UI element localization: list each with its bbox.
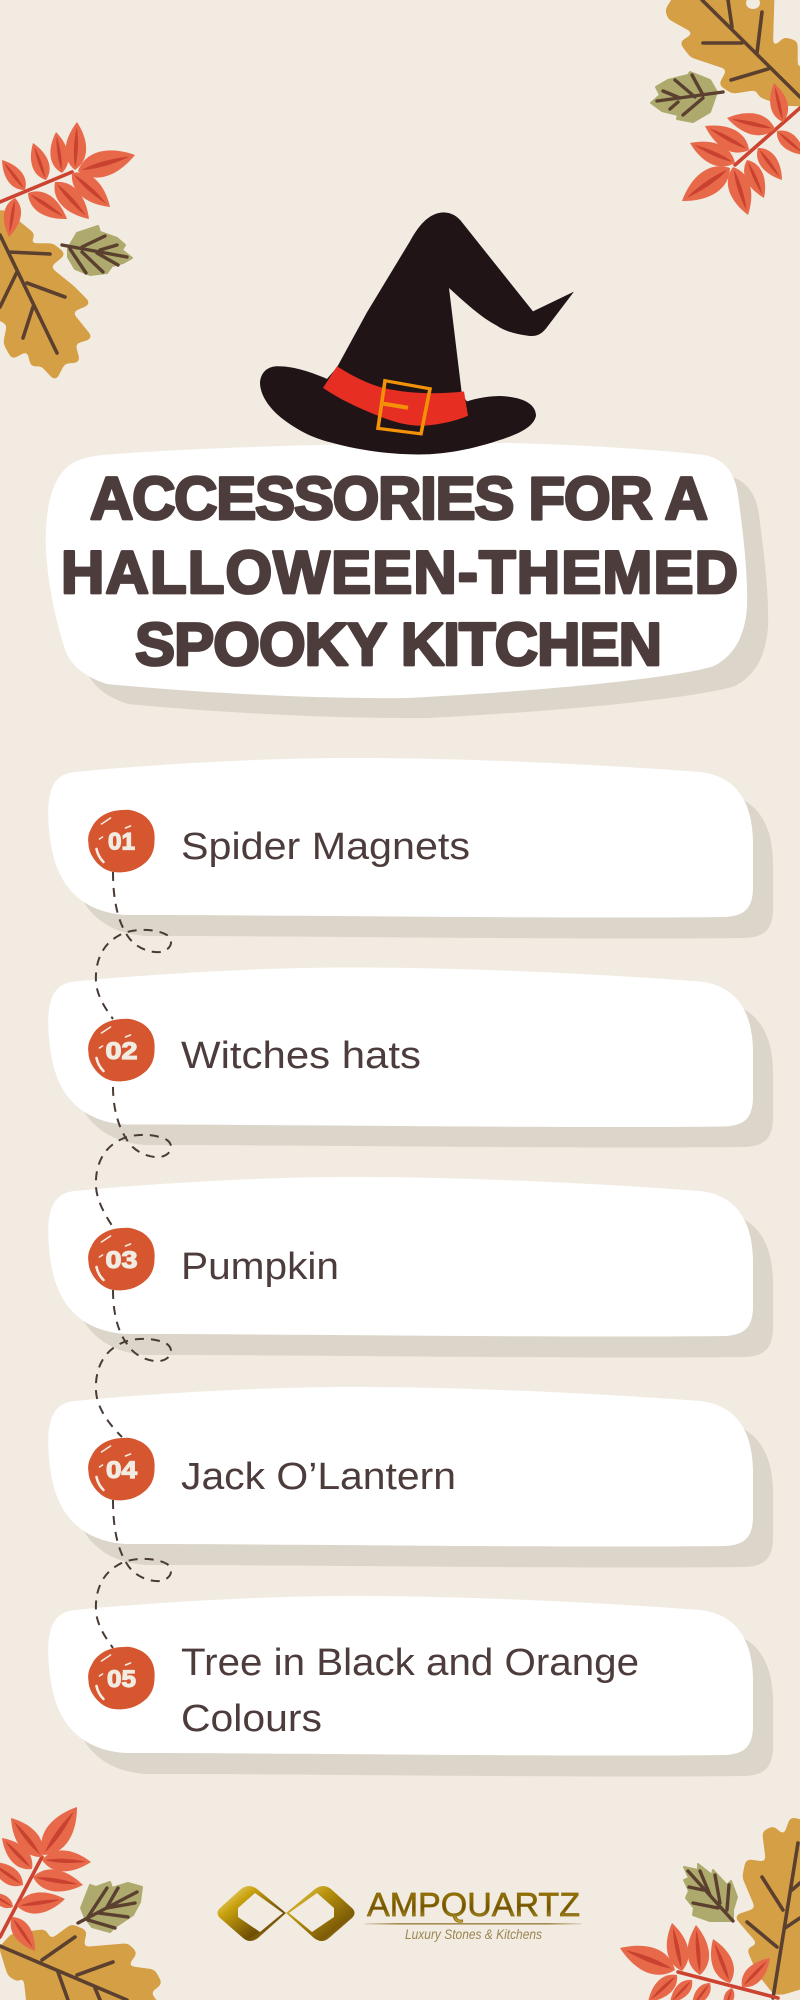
card 4 shadow <box>68 1408 773 1568</box>
witch hat <box>260 212 574 455</box>
title: SPOOKY KITCHEN <box>135 611 662 678</box>
dashed connector 1 to 2 <box>96 872 171 1019</box>
dashed connector 4 to 5 <box>96 1500 171 1648</box>
badge 05 <box>88 1647 155 1709</box>
dashed connector 2 to 3 <box>96 1087 171 1227</box>
title panel <box>46 443 747 698</box>
rowan sprig <box>0 122 138 238</box>
leaf cluster: bottom right <box>615 1820 800 2000</box>
badge 05: 05 <box>107 1666 136 1693</box>
title panel shadow <box>67 463 768 718</box>
card 3 <box>48 1177 753 1337</box>
orange buckle <box>378 381 430 434</box>
card 5 <box>48 1596 753 1756</box>
title <box>61 465 738 678</box>
item 2 text: Witches hats <box>181 1035 421 1077</box>
item 5 text <box>181 1642 639 1740</box>
card 5 shadow <box>68 1617 773 1777</box>
card 2 <box>48 968 753 1127</box>
badge 01: 01 <box>108 828 135 856</box>
oak leaf <box>738 1820 800 1998</box>
item 5 text: Tree in Black and Orange <box>181 1642 639 1684</box>
title: HALLOWEEN-THEMED <box>61 539 738 606</box>
green leaf <box>684 1864 737 1921</box>
card 2 shadow <box>68 988 773 1148</box>
green leaf <box>78 1882 142 1932</box>
oak leaf <box>0 1927 162 2000</box>
badge 01 <box>88 810 155 872</box>
green leaf <box>62 226 132 275</box>
red band <box>323 366 468 426</box>
rowan sprig <box>675 81 800 218</box>
title: ACCESSORIES FOR A <box>90 465 708 532</box>
badge 04: 04 <box>106 1457 138 1484</box>
leaf cluster: top left <box>0 122 138 377</box>
hat crown and brim <box>260 212 574 455</box>
item 5 text: Colours <box>181 1698 322 1740</box>
logo: Ampquartz <box>218 1886 581 1942</box>
card 1 <box>48 758 753 918</box>
logo tagline: Luxury Stones & Kitchens <box>405 1926 542 1942</box>
card 4 <box>48 1387 753 1547</box>
logo wordmark: AMPQUARTZ <box>367 1886 580 1923</box>
badge 03: 03 <box>106 1247 138 1274</box>
leaf cluster: top right <box>651 0 800 218</box>
green leaf <box>651 72 723 122</box>
item 1 text: Spider Magnets <box>181 826 470 868</box>
badge 02 <box>88 1019 155 1081</box>
leaf cluster: bottom left <box>0 1800 162 2000</box>
rowan sprig <box>0 1800 91 1956</box>
oak leaf <box>668 0 800 104</box>
item 3 text: Pumpkin <box>181 1246 339 1288</box>
badge 03 <box>88 1228 155 1290</box>
logo rule <box>365 1923 581 1925</box>
badge 04 <box>88 1438 155 1500</box>
item 4 text: Jack O’Lantern <box>181 1456 456 1498</box>
badge 02: 02 <box>106 1038 138 1065</box>
card 1 shadow <box>68 779 773 939</box>
dashed connector 3 to 4 <box>96 1290 171 1437</box>
oak leaf <box>0 213 89 377</box>
logo mark: gold infinity <box>218 1886 354 1941</box>
card 3 shadow <box>68 1198 773 1358</box>
rowan sprig <box>615 1921 778 2000</box>
